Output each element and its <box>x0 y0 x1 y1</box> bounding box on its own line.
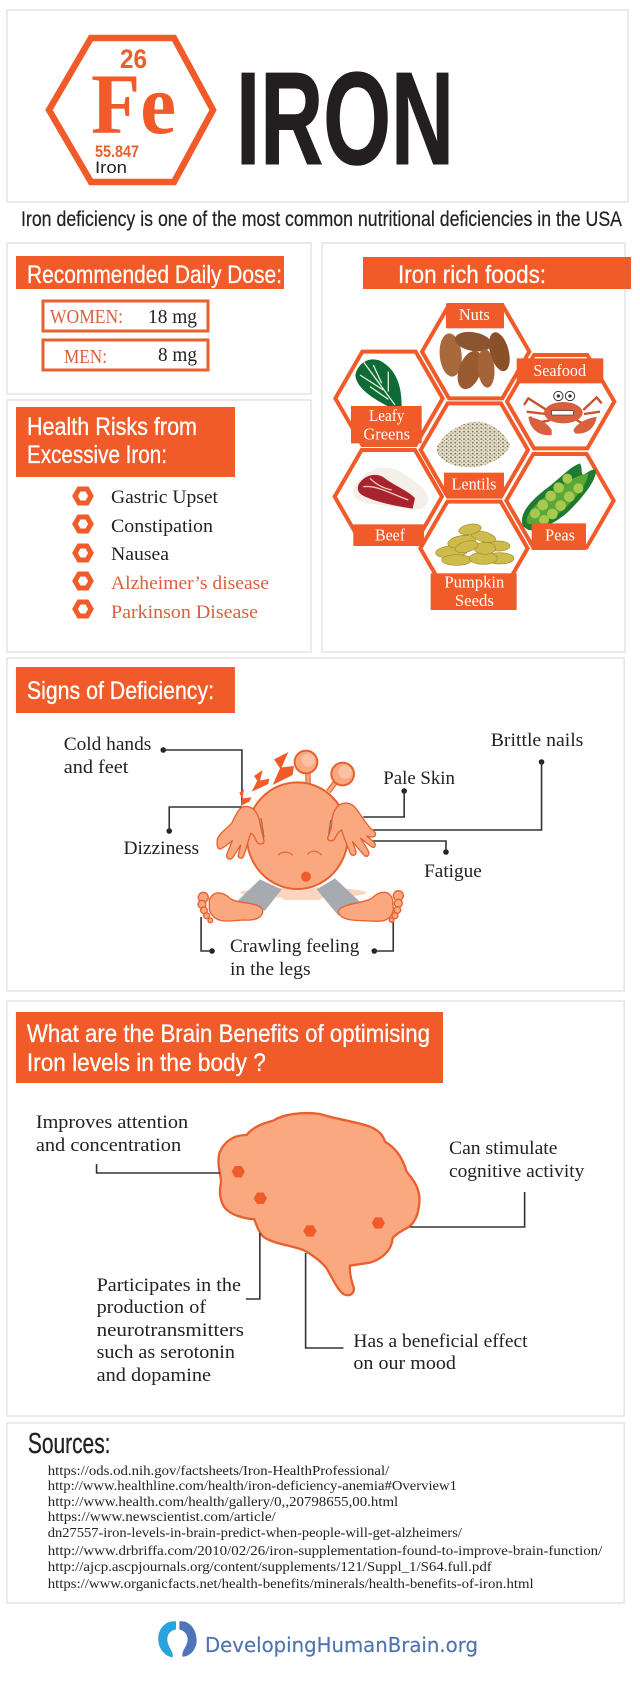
heading: brain benefits: What are the Brain Benefits of optimising <box>27 1020 430 1048</box>
callout: pale skin <box>363 768 455 817</box>
icon: iron element hexagon <box>49 38 213 182</box>
food: lentils <box>421 403 528 497</box>
women dose box <box>43 301 208 331</box>
heading: recommended daily dose: Recommended Daily Dose: <box>27 261 282 289</box>
antennae <box>295 751 354 792</box>
heading: brain benefits <box>16 1012 443 1083</box>
women dose box: 18 mg <box>148 306 197 328</box>
heading: health risks: Excessive Iron: <box>27 441 167 469</box>
heading: sources: Sources: <box>28 1428 111 1460</box>
source list: https://www.organicfacts.net/health-benefits/minerals/health-benefits-of-iron.html <box>48 1577 534 1592</box>
callout: mood: on our mood <box>353 1353 456 1374</box>
heading: health risks: Health Risks from <box>27 413 197 441</box>
food: peas: Peas <box>545 526 575 545</box>
food: nuts <box>422 303 529 398</box>
callout: attention and concentration <box>36 1112 220 1173</box>
food: beef: Beef <box>375 526 406 545</box>
food: leafy greens: Leafy <box>369 406 405 425</box>
callout: neurotransmitters <box>97 1233 260 1386</box>
logo: DevelopingHumanBrain.org: DevelopingHumanBrain.org <box>205 1633 478 1657</box>
icon: iron element hexagon: 55.847 <box>95 142 139 161</box>
callout: crawling feeling in the legs: in the legs <box>230 959 311 980</box>
men dose box <box>43 340 208 370</box>
food: pumpkin seeds: Seeds <box>455 591 494 610</box>
panel: brain benefits <box>7 1001 624 1416</box>
risk: nausea: Nausea <box>111 544 170 565</box>
heading: health risks <box>16 407 235 477</box>
callout: attention and concentration: and concentration <box>36 1135 182 1156</box>
risk: nausea <box>75 544 170 565</box>
source list: http://www.healthline.com/health/iron-deficiency-anemia#Overview1 <box>48 1479 457 1494</box>
callout: fatigue: Fatigue <box>424 861 482 882</box>
risk: alzheimer's disease: Alzheimer’s disease <box>111 573 269 594</box>
women dose box: WOMEN: <box>50 306 123 328</box>
logo mark <box>158 1621 197 1657</box>
callout: crawling feeling in the legs <box>201 917 393 980</box>
panel: iron rich foods <box>322 243 631 652</box>
illustration: tired character <box>198 751 403 923</box>
source list <box>48 1464 602 1592</box>
callout: mood: Has a beneficial effect <box>353 1331 528 1352</box>
face <box>278 851 322 882</box>
food honeycomb <box>335 303 614 610</box>
heading: brain benefits: Iron levels in the body ? <box>27 1049 266 1077</box>
callout: neurotransmitters: production of <box>97 1297 207 1318</box>
callout: brittle nails: Brittle nails <box>491 730 583 751</box>
food: nuts: Nuts <box>459 305 490 324</box>
panel: signs of deficiency <box>7 658 624 991</box>
men dose box: 8 mg <box>158 344 197 366</box>
title: IRON: IRON <box>236 45 454 192</box>
food: seafood: Seafood <box>533 361 586 380</box>
source list: http://www.drbriffa.com/2010/02/26/iron-supplementation-found-to-improve-brain-function/ <box>48 1544 602 1559</box>
source list: https://www.newscientist.com/article/ <box>48 1510 276 1525</box>
icon: iron element hexagon: 26 <box>120 44 147 74</box>
panel: health risks <box>7 400 311 652</box>
callout: attention and concentration: Improves attention <box>36 1112 189 1133</box>
heading: signs of deficiency: Signs of Deficiency: <box>27 677 214 705</box>
panel: sources <box>7 1423 624 1603</box>
men dose box: MEN: <box>64 346 107 368</box>
food: peas <box>506 454 614 550</box>
food: beef <box>335 450 442 546</box>
source list: https://ods.od.nih.gov/factsheets/Iron-HealthProfessional/ <box>48 1464 389 1479</box>
source list: http://www.health.com/health/gallery/0,,20798655,00.html <box>48 1495 398 1510</box>
heading: iron rich foods: Iron rich foods: <box>398 261 546 289</box>
food: seafood <box>507 355 614 448</box>
callout: crawling feeling in the legs: Crawling feeling <box>230 936 360 957</box>
hands <box>217 803 376 859</box>
callout: neurotransmitters: neurotransmitters <box>97 1320 244 1341</box>
food: lentils: Lentils <box>451 474 496 493</box>
callout: dizziness: Dizziness <box>123 838 199 859</box>
panel: recommended daily dose <box>7 243 311 394</box>
callout: brittle nails <box>373 730 583 830</box>
logo: DevelopingHumanBrain.org <box>158 1621 478 1657</box>
callout: neurotransmitters: Participates in the <box>97 1275 241 1296</box>
callout: cognitive activity <box>410 1138 585 1227</box>
callout: cold hands and feet: Cold hands <box>64 734 151 755</box>
callout: cold hands and feet: and feet <box>64 757 129 778</box>
callout: dizziness <box>123 807 242 859</box>
feet <box>198 891 403 923</box>
risk: constipation: Constipation <box>111 516 214 537</box>
heading: iron rich foods <box>363 257 631 289</box>
food: pumpkin seeds: Pumpkin <box>444 572 504 591</box>
callout: fatigue <box>370 841 482 882</box>
source list: dn27557-iron-levels-in-brain-predict-when-people-will-get-alzheimers/ <box>48 1526 462 1541</box>
illustration: brain <box>218 1113 419 1295</box>
callout: cognitive activity: cognitive activity <box>449 1161 585 1182</box>
food: leafy greens <box>335 352 443 445</box>
source list: http://ajcp.ascpjournals.org/content/supplements/121/Suppl_1/S64.full.pdf <box>48 1560 492 1575</box>
callout: cognitive activity: Can stimulate <box>449 1138 557 1159</box>
callout: neurotransmitters: and dopamine <box>97 1365 211 1386</box>
panel: title <box>7 10 628 202</box>
callout: cold hands and feet <box>64 734 242 805</box>
risk: gastric upset: Gastric Upset <box>111 487 219 508</box>
heading: signs of deficiency <box>16 667 235 713</box>
food: leafy greens: Greens <box>363 424 410 443</box>
icon: iron element hexagon: Fe <box>91 56 176 152</box>
callout: pale skin: Pale Skin <box>383 768 455 789</box>
callout: mood <box>306 1253 528 1374</box>
risk: parkinson disease: Parkinson Disease <box>111 602 258 623</box>
callout: neurotransmitters: such as serotonin <box>97 1342 235 1363</box>
food: pumpkin seeds <box>420 502 528 610</box>
zzz <box>239 752 294 806</box>
icon: iron element hexagon: Iron <box>95 158 127 177</box>
